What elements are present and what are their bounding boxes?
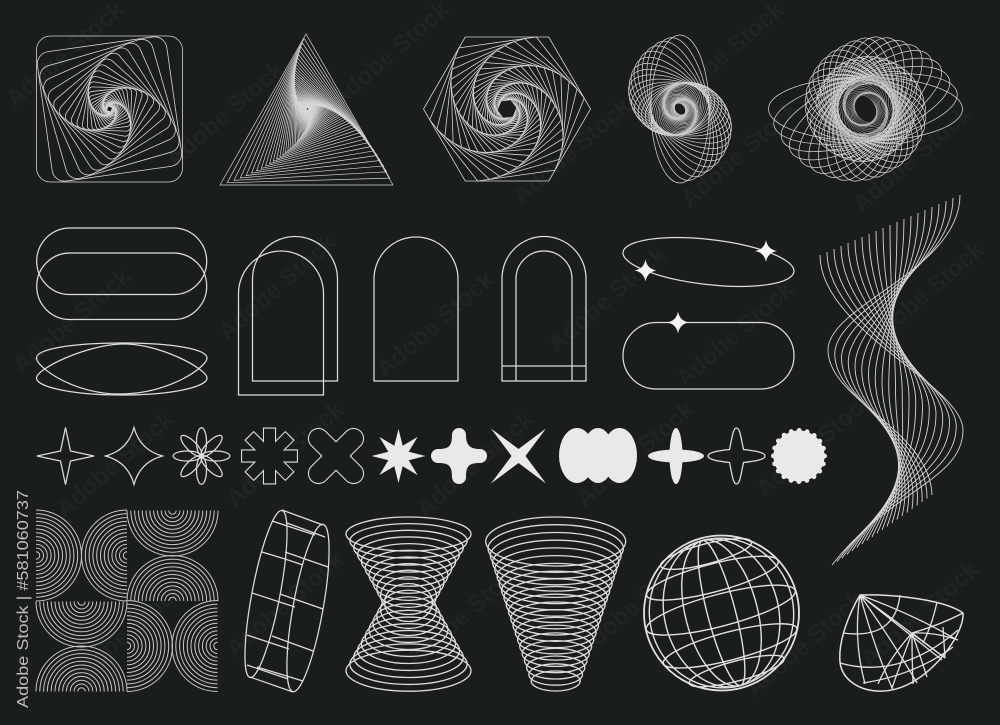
spiral: wide ellipses [768, 27, 963, 191]
stacked stadium frames [37, 228, 207, 320]
spiral: rounded square [36, 35, 183, 183]
icon: filled oval cross [648, 428, 704, 484]
watermark text: Adobe Stock [401, 556, 530, 673]
credit text: Adobe Stock | #581060737 [15, 490, 32, 708]
watermark text: Adobe Stock [856, 556, 985, 673]
tilted oval with sparkles [621, 230, 796, 294]
icon: flower outline [173, 428, 230, 484]
crossed ovals [36, 343, 207, 395]
spiral: tall ellipses [616, 34, 744, 184]
watermark text: Adobe Stock [741, 586, 870, 703]
icon: scalloped badge [774, 430, 824, 482]
wireframe hourglass [346, 517, 471, 691]
watermark text: Adobe Stock [411, 406, 540, 523]
spiral: triangle [220, 34, 393, 185]
icon: filled x sparkle [491, 428, 546, 484]
wireframe half dome [840, 595, 963, 691]
offset arches [238, 236, 338, 395]
watermark text: Adobe Stock [751, 386, 880, 503]
watermark text: Adobe Stock [221, 546, 350, 663]
stadium with sparkle [623, 312, 794, 389]
icon: three overlapping ovals [559, 428, 637, 483]
watermark text: Adobe Stock [8, 263, 137, 380]
watermark text: Adobe Stock [571, 546, 700, 663]
watermark text: Adobe Stock [571, 396, 700, 513]
icon: asterisk outline [241, 428, 298, 484]
watermark text: Adobe Stock [543, 241, 672, 358]
wave blend [820, 195, 963, 565]
watermark text: Adobe Stock [213, 229, 342, 346]
watermark text: Adobe Stock [221, 396, 350, 513]
icon: thin four-point star [37, 428, 94, 484]
watermark text: Adobe Stock [671, 276, 800, 393]
wireframe globe [627, 518, 816, 708]
icon: filled rounded plus [431, 428, 487, 484]
nested arch [502, 236, 586, 381]
plain arch [374, 237, 458, 381]
concentric half-circle tiles [36, 510, 218, 692]
watermark text: Adobe Stock [676, 96, 805, 213]
wireframe band [236, 508, 338, 694]
watermark text: Adobe Stock [371, 266, 500, 383]
icon: rounded cross outline [318, 438, 354, 474]
watermark text: Adobe Stock [51, 406, 180, 523]
icon: outline oval cross [708, 428, 765, 484]
icon: filled eight-point star [372, 429, 426, 483]
watermark text: Adobe Stock [861, 236, 990, 353]
watermark text: Adobe Stock [61, 576, 190, 693]
icon: curved four-point star [106, 428, 162, 484]
watermark text: Adobe Stock [161, 56, 290, 173]
wireframe cone [486, 517, 626, 691]
spiral: hexagon [414, 17, 600, 201]
watermark text: Adobe Stock [508, 93, 637, 210]
watermark text: Adobe Stock [848, 101, 977, 218]
